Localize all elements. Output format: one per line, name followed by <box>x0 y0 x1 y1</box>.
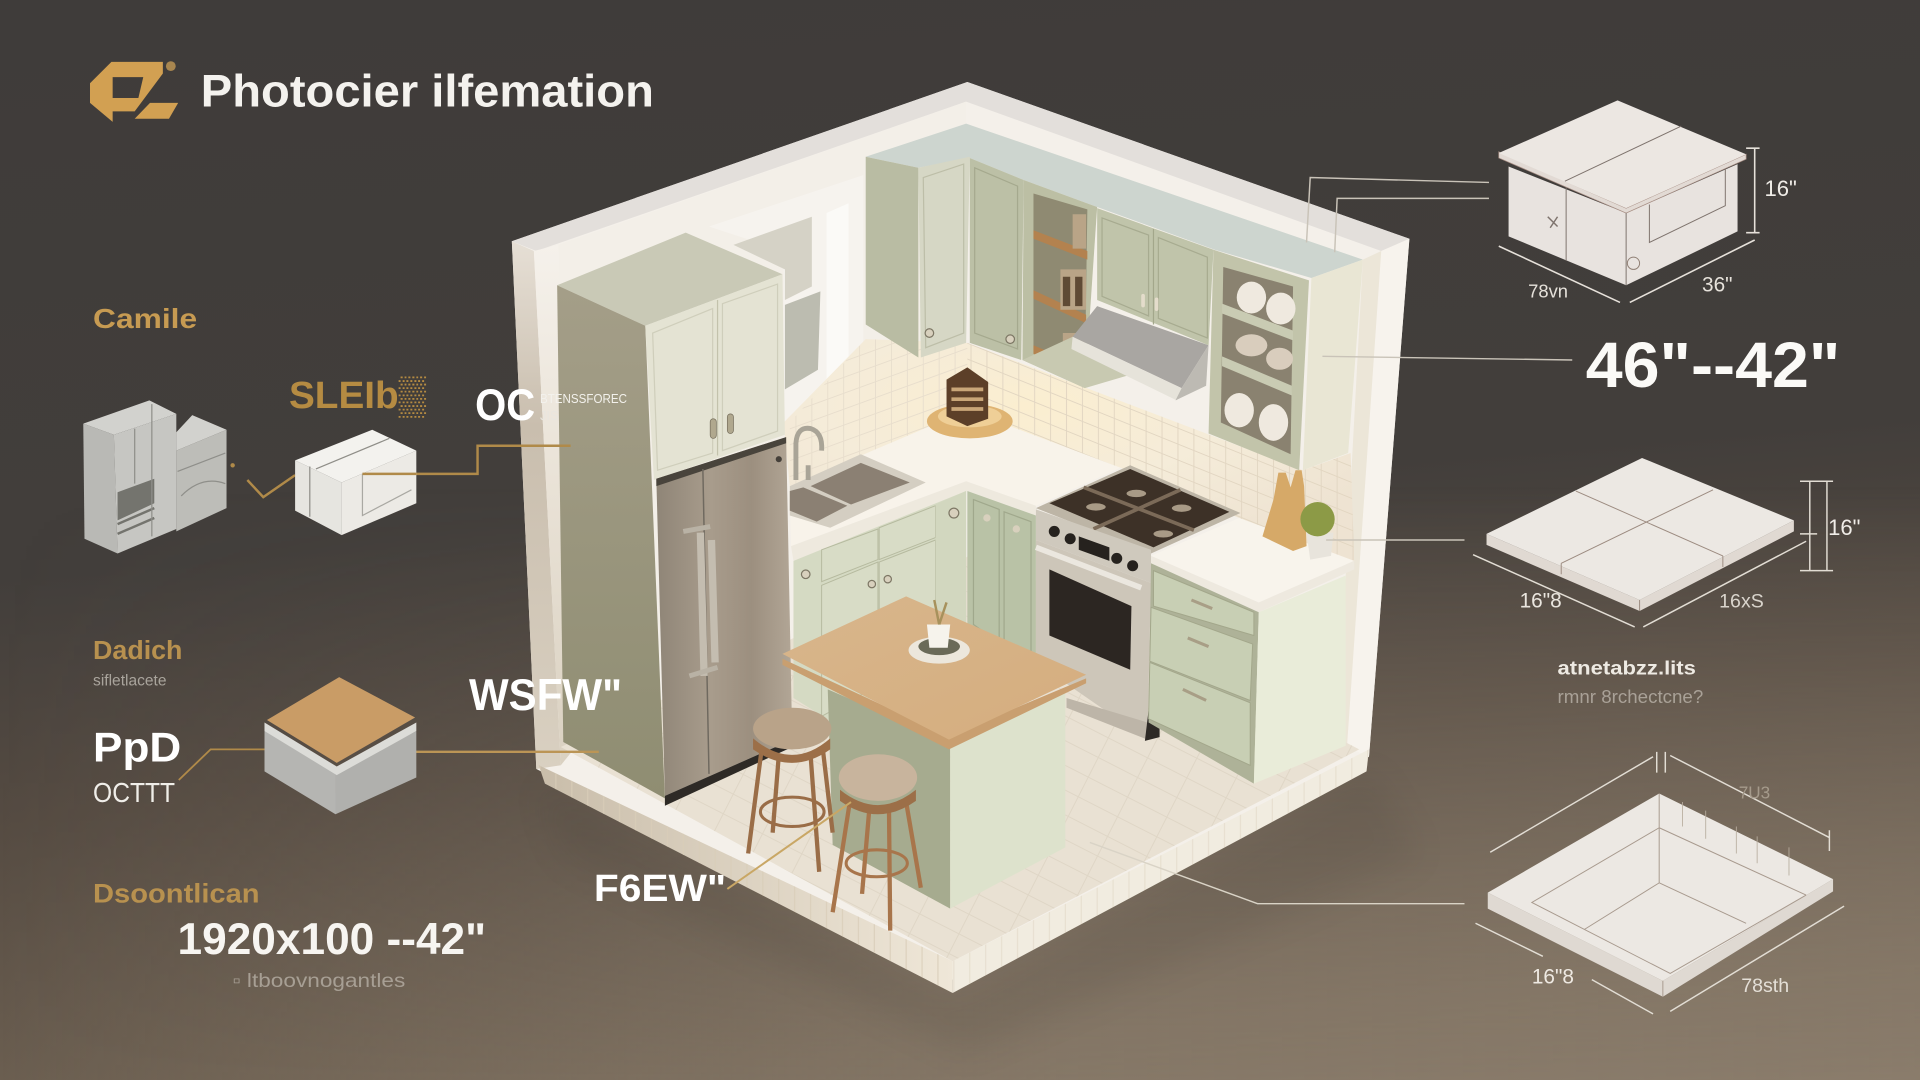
faucet <box>796 428 822 480</box>
crown molding <box>866 124 1363 278</box>
floor shadow <box>539 771 1420 1053</box>
refrigerator <box>656 437 792 806</box>
big dimension: 46"--42" <box>1586 330 1840 401</box>
diagram: top right box <box>1499 100 1797 302</box>
tall cabinet top <box>557 233 782 326</box>
vase on plate <box>909 600 970 664</box>
dimension: 16" <box>1764 176 1797 201</box>
callout lines top right <box>1307 178 1572 540</box>
sink <box>790 454 926 528</box>
background <box>0 479 1920 1080</box>
upper cabinet: end panel <box>866 157 918 358</box>
stool left <box>748 708 833 872</box>
stove <box>1036 465 1240 741</box>
dimension: 16"8 <box>1532 965 1574 988</box>
countertop edge <box>791 481 1036 561</box>
kitchen isometric illustration <box>512 82 1420 1053</box>
oc small text: BTENSSFOREC <box>540 391 627 406</box>
window <box>709 175 863 422</box>
right counter <box>1151 518 1354 602</box>
left section: dadich <box>93 637 622 814</box>
right base side <box>1254 576 1346 784</box>
label: Dsoontlican <box>93 878 260 908</box>
dimension: 16"8 <box>1520 589 1562 612</box>
logo <box>90 61 178 122</box>
room shell <box>512 82 1409 980</box>
leader lines <box>179 178 1572 904</box>
upper glass shelf with jars <box>1209 250 1309 470</box>
upper cabinet: tall door <box>970 158 1024 360</box>
wall cap <box>512 82 1409 251</box>
drawers <box>1149 563 1259 784</box>
tabletop display and tray <box>927 367 1013 438</box>
oc label: OC <box>475 381 535 430</box>
dimension: 78vn <box>1528 281 1568 302</box>
inner left wall <box>558 102 966 747</box>
countertop <box>790 410 1120 546</box>
big label: PpD <box>93 724 181 771</box>
dimension ghost: 7U3 <box>1739 782 1770 802</box>
gold callout F6EW <box>727 802 851 889</box>
upper end panel <box>1303 260 1363 470</box>
white box icon <box>295 430 416 535</box>
heading: SLEIb▒ <box>289 375 426 418</box>
left section: dsoontlican <box>93 878 486 992</box>
callout line bottom right <box>1090 842 1464 904</box>
range hood <box>1071 306 1209 400</box>
lower cabinets corner <box>967 491 1036 686</box>
label: Camile <box>93 303 197 334</box>
right wall outer strip <box>1347 239 1409 757</box>
lower cabinets left <box>793 491 966 722</box>
right counter edge <box>1151 556 1354 612</box>
upper cabinet: corner door <box>918 157 970 358</box>
base front right <box>953 749 1369 993</box>
dimension: 36" <box>1702 273 1733 296</box>
hood support <box>1022 337 1130 388</box>
dimension value: 1920x100 --42" <box>178 915 486 964</box>
left section: camile <box>83 303 627 553</box>
gold callout WSFW <box>373 751 599 753</box>
dimension: 78sth <box>1741 975 1789 997</box>
upper double door cabinet <box>1097 208 1213 345</box>
cabinet cluster icon <box>83 400 235 553</box>
slab caption: atnetabzz.lits <box>1558 658 1696 680</box>
left wall outer strip <box>512 241 561 769</box>
oc small text second line: JIS <box>540 408 559 423</box>
gold check connector <box>247 475 295 497</box>
slab sub caption: rmnr 8rchectcne? <box>1558 686 1703 707</box>
island side left <box>828 689 950 909</box>
gold callout PpD <box>179 749 264 780</box>
gold callout OC <box>362 446 571 474</box>
dimension: 16" <box>1828 515 1860 540</box>
floor <box>561 551 1359 961</box>
wsfw label: WSFW" <box>469 671 622 720</box>
diagram: tray <box>1476 752 1844 1014</box>
left wall inner band <box>534 245 576 765</box>
dimension: 16xS <box>1719 590 1764 612</box>
sublabel: sifletlacete <box>93 673 167 690</box>
stool right <box>833 754 921 931</box>
tall cabinet side <box>557 285 665 798</box>
island side right <box>950 689 1065 909</box>
knife block and plant <box>1262 470 1335 560</box>
f6ew label: F6EW" <box>594 868 726 910</box>
tall cabinet doors <box>645 274 785 480</box>
wood-top box icon <box>264 677 416 814</box>
island top <box>782 596 1086 749</box>
base front left <box>539 765 953 993</box>
upper open shelf <box>1022 180 1097 388</box>
title: Photocier ilfemation <box>201 66 654 117</box>
caption: ▫ ltboovnogantles <box>233 970 406 992</box>
diagram: slab <box>1473 458 1860 627</box>
label: Dadich <box>93 637 182 665</box>
code: OCTTT <box>93 777 175 808</box>
backsplash <box>784 339 1354 563</box>
gold line over box <box>362 473 416 475</box>
right wall inner strip <box>1337 251 1381 747</box>
